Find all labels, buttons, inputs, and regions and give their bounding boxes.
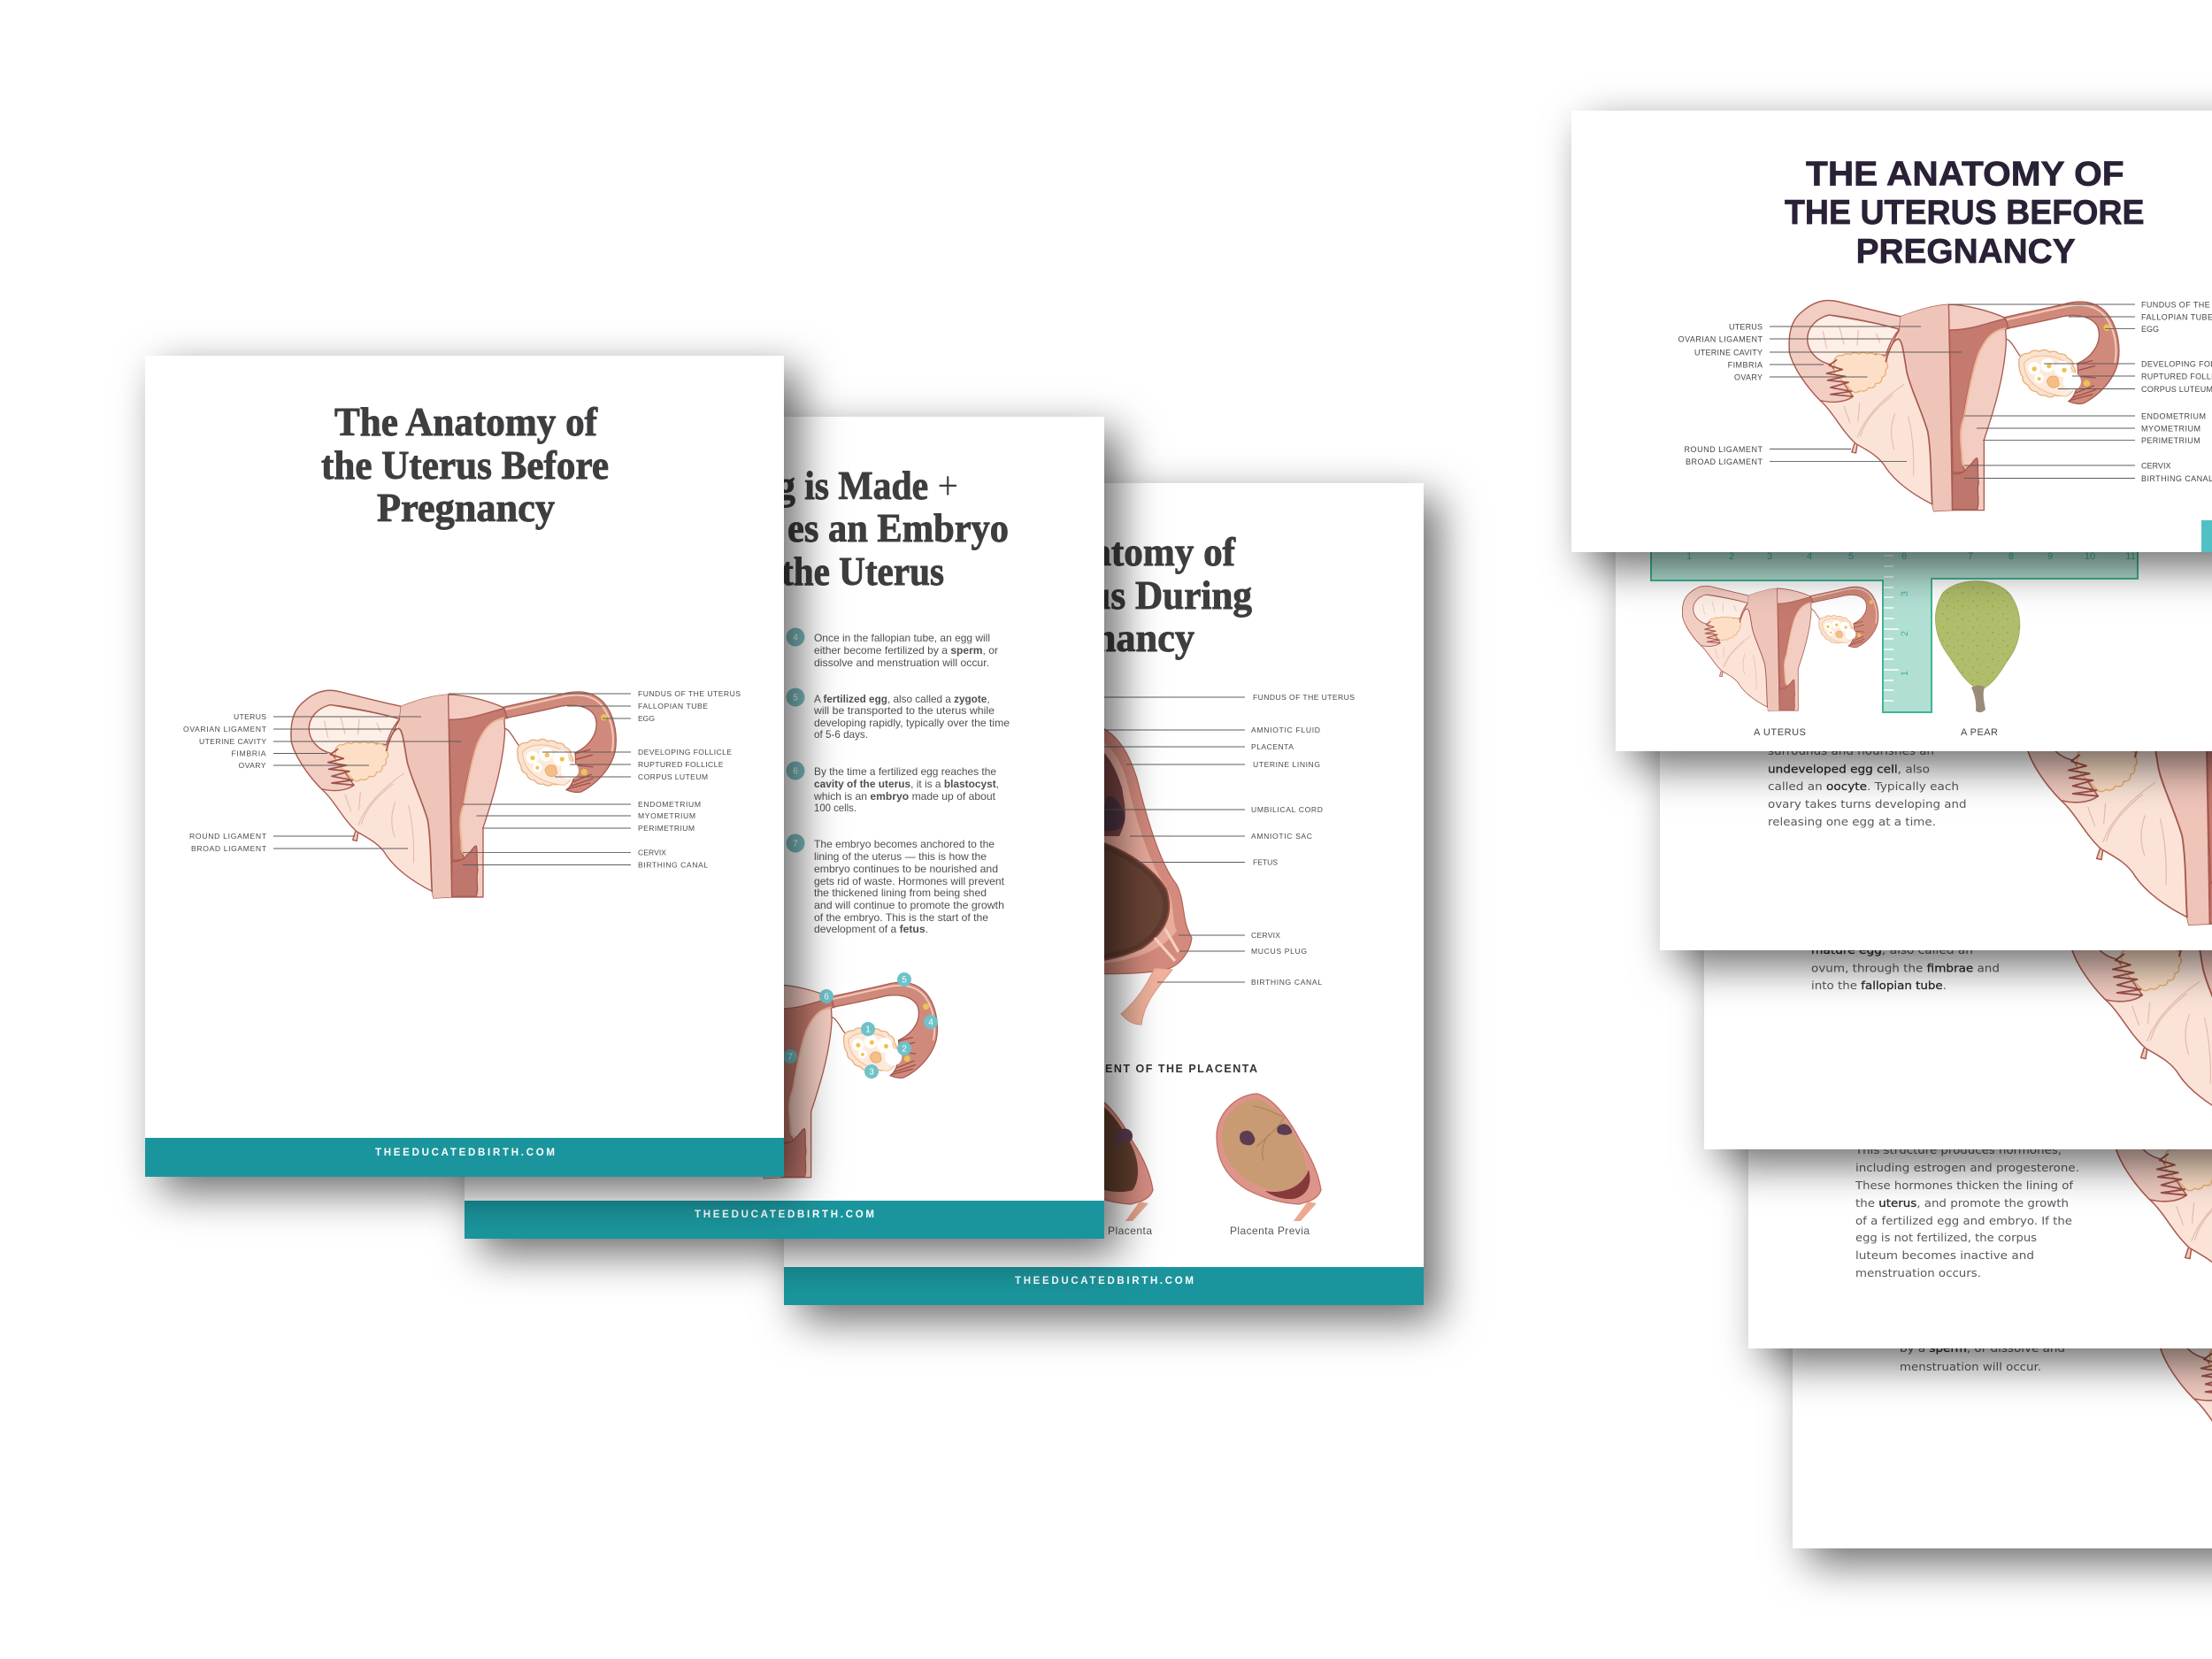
text: oocyte: ovary takes turns developing and (1768, 797, 1966, 810)
illustration: a uterus (1682, 586, 1878, 711)
labels: uterus callouts: CORPUS LUTEUM (2141, 385, 2212, 394)
footer bar (784, 1267, 1424, 1305)
sheet: page background (1748, 951, 2212, 1348)
labels: uterus callouts: ROUND LIGAMENT (189, 832, 267, 841)
labels: uterus callouts: FALLOPIAN TUBE (2141, 313, 2212, 322)
illustration: uterus (1789, 301, 2119, 511)
text: step 7: The embryo becomes anchored to the (814, 838, 995, 850)
title: the anatomy of the uterus before pregnancy: THE UTERUS BEFORE (1785, 194, 2145, 232)
text: hormones: of a fertilized egg and embryo. If the (1855, 1214, 2072, 1227)
text: oocyte: releasing one egg at a time. (1768, 815, 1936, 828)
number badges: uterus stages: 3 (869, 1067, 874, 1078)
ruler: 3 (1900, 591, 1910, 596)
footer bar segment (2201, 520, 2212, 552)
sheet: page background (1704, 752, 2212, 1149)
labels: uterus callouts: MYOMETRIUM (638, 811, 695, 820)
text: step 5: of 5-6 days. (814, 728, 868, 741)
labels: uterus callouts: ENDOMETRIUM (2141, 412, 2206, 421)
illustration: uterus (2115, 1087, 2212, 1324)
footer bar: THEEDUCATEDBIRTH.COM (1015, 1276, 1194, 1286)
panel: how an egg is made page (465, 417, 1104, 1239)
labels: uterus callouts: PERIMETRIUM (2141, 436, 2200, 445)
text: step 7: of the embryo. This is the start of the (814, 911, 988, 924)
number badges: steps 4 to 7: 6 (793, 766, 798, 777)
title: the anatomy of the uterus before pregnancy (1785, 156, 2145, 271)
text: mature egg: into the fallopian tube . (1811, 979, 1947, 992)
labels: uterus callouts: BROAD LIGAMENT (1686, 457, 1763, 466)
labels: uterus callouts: FIMBRIA (1728, 361, 1763, 370)
labels: uterus callouts: PERIMETRIUM (638, 824, 695, 833)
panel: stacked page with menstruation text (1793, 1150, 2212, 1548)
number badges: uterus stages: 7 (787, 1053, 793, 1062)
title: the anatomy of the uterus before pregnancy: PREGNANCY (1856, 233, 2076, 271)
labels: pregnant uterus callouts: UTERINE LINING (1253, 760, 1320, 769)
labels: uterus callouts: CERVIX (638, 849, 666, 857)
text: hormones: This structure produces hormones, (1855, 1143, 2062, 1156)
labels: pregnant uterus callouts: UMBILICAL CORD (1251, 805, 1323, 814)
text: step 5: developing rapidly, typically over the time (814, 717, 1010, 729)
text: step 7: embryo continues to be nourished and (814, 863, 998, 875)
text: oocyte: called an oocyte . Typically each (1768, 780, 1959, 793)
ruler: 9 (2047, 551, 2053, 562)
panel: anatomy before pregnancy page (145, 356, 784, 1177)
text: hormones: including estrogen and progesterone. (1855, 1161, 2079, 1174)
caption: placenta previa: Placenta Previa (1230, 1225, 1310, 1237)
labels: pregnant uterus callouts: FUNDUS OF THE UTERUS (1253, 693, 1355, 702)
panel: stacked page with ovary text (1660, 566, 2212, 950)
text: step 7 (814, 838, 1005, 935)
number badges: uterus stages (783, 972, 938, 1079)
labels: uterus callouts: ROUND LIGAMENT (1685, 445, 1763, 454)
title: anatomy during pregnancy (955, 530, 1252, 660)
title: egg to embryo (777, 464, 1009, 594)
text: step 6: cavity of the uterus, it is a blastocyst, (814, 778, 999, 790)
labels: uterus callouts: FALLOPIAN TUBE (638, 702, 708, 710)
number badges: steps 4 to 7: 5 (793, 694, 798, 703)
labels: uterus callouts: FUNDUS OF THE UTERUS (638, 689, 741, 698)
ruler: 2 (1729, 551, 1734, 562)
text: hormones (1855, 1143, 2079, 1279)
labels: uterus callouts (183, 689, 741, 869)
caption: a uterus: A UTERUS (1754, 727, 1806, 738)
panel: size comparison page (1616, 354, 2212, 751)
labels: uterus callouts: ENDOMETRIUM (638, 800, 701, 809)
labels: uterus callouts: BIRTHING CANAL (2141, 474, 2212, 483)
panel: stacked page with corpus luteum text (1748, 951, 2212, 1348)
title: egg to embryo: es an Embryo (787, 506, 1009, 550)
number badges: uterus stages: 4 (928, 1018, 933, 1028)
text: mature egg: mature egg , also called an (1811, 943, 1973, 956)
footer bar: THEEDUCATEDBIRTH.COM (375, 1148, 555, 1158)
caption: a pear: A PEAR (1961, 727, 1998, 738)
ruler: 1 (1686, 551, 1692, 562)
number badges: uterus stages: 2 (902, 1044, 907, 1055)
labels: uterus callouts: UTERINE CAVITY (199, 737, 266, 746)
title: anatomy during pregnancy: the Uterus During (955, 573, 1252, 618)
number badges: uterus stages: 5 (902, 975, 907, 986)
ruler: 8 (2008, 551, 2014, 562)
footer bar: THEEDUCATEDBIRTH.COM (695, 1210, 874, 1220)
labels: uterus callouts: UTERUS (234, 712, 266, 721)
labels: uterus callouts: OVARY (239, 761, 266, 770)
labels: uterus callouts: OVARIAN LIGAMENT (183, 725, 267, 733)
labels: pregnant uterus callouts: FETUS (1253, 858, 1278, 867)
text: step 4: dissolve and menstruation will occur. (814, 657, 989, 669)
title: anatomy before pregnancy: Pregnancy (377, 486, 555, 530)
labels: uterus callouts: CERVIX (2141, 462, 2171, 471)
title: egg to embryo: the Uterus (781, 549, 944, 594)
labels: uterus callouts: OVARIAN LIGAMENT (1678, 334, 1763, 343)
number badges: steps 4 to 7: 4 (793, 634, 798, 642)
footer bar (145, 1138, 784, 1177)
text: step 5: will be transported to the uterus while (813, 704, 995, 717)
labels: uterus callouts: OVARY (1734, 373, 1763, 382)
illustration: placenta diagram (1048, 1094, 1153, 1221)
ruler: 5 (1848, 551, 1854, 562)
text: mature egg (1811, 943, 2000, 992)
text: step 7: development of a fetus. (814, 923, 928, 935)
labels: uterus callouts: EGG (2141, 325, 2159, 334)
labels: pregnant uterus callouts (1062, 693, 1355, 987)
ruler: 1 (1900, 671, 1910, 676)
text: mature egg: ovum, through the fimbrae and (1811, 962, 2000, 975)
illustration: uterus (2070, 887, 2212, 1124)
labels: uterus callouts: BIRTHING CANAL (638, 860, 708, 869)
title: anatomy during pregnancy: Pregnancy (1017, 616, 1194, 660)
title: anatomy before pregnancy: The Anatomy of (334, 400, 598, 444)
panel: placement page during pregnancy (784, 483, 1424, 1305)
labels: pregnant uterus callouts: CERVIX (1251, 931, 1280, 940)
ruler (1651, 442, 2138, 712)
labels: uterus callouts: DEVELOPING FOLLICLE (638, 748, 732, 757)
text: step 4: either become fertilized by a sperm, or (814, 644, 998, 657)
text: step 4 (814, 632, 998, 669)
labels: uterus callouts: EGG (638, 714, 655, 723)
text: step 6: which is an embryo made up of about (813, 790, 996, 803)
illustration: uterus with numbered stages (629, 981, 937, 1179)
illustration: pregnant uterus (1062, 715, 1192, 1025)
sheet: page background (465, 417, 1104, 1239)
footer bar (465, 1201, 1104, 1239)
sheet: page background (1660, 566, 2212, 950)
labels: uterus callouts: CORPUS LUTEUM (638, 772, 708, 781)
text: step 4: Once in the fallopian tube, an egg will (814, 632, 990, 644)
number badges: uterus stages: 6 (824, 993, 829, 1002)
text: hormones: luteum becomes inactive and (1855, 1248, 2034, 1262)
illustration: uterus (291, 690, 616, 898)
panel: top page anatomy before pregnancy (1571, 111, 2212, 552)
ruler: 3 (1767, 551, 1772, 562)
labels: pregnant uterus callouts: MUCUS PLUG (1251, 947, 1307, 956)
text: oocyte: undeveloped egg cell , also (1768, 763, 1930, 776)
text: egg dissolves (1900, 1341, 2065, 1373)
ruler: 10 (2085, 551, 2095, 562)
title: anatomy before pregnancy (321, 400, 609, 530)
title: egg to embryo: g is Made + (777, 464, 958, 508)
labels: uterus callouts: BROAD LIGAMENT (191, 844, 267, 853)
number badges: steps 4 to 7 (786, 628, 805, 853)
sheet: page background (1616, 354, 2212, 751)
labels: uterus callouts: MYOMETRIUM (2141, 425, 2200, 434)
labels: uterus callouts (1678, 301, 2212, 483)
illustration: uterus (2159, 1286, 2212, 1523)
ruler: 2 (1900, 631, 1910, 636)
text: hormones: the uterus, and promote the growth (1855, 1196, 2069, 1210)
sheet: page background (145, 356, 784, 1177)
text: step 7: the thickened lining from being shed (814, 887, 987, 899)
ruler: 6 (1901, 551, 1907, 562)
text: oocyte (1768, 744, 1966, 828)
text: egg dissolves: by a sperm , or dissolve and (1900, 1341, 2065, 1355)
labels: uterus callouts: FIMBRIA (232, 749, 266, 757)
caption: placenta: Placenta (1108, 1225, 1152, 1237)
sheet: page background (1793, 1150, 2212, 1548)
title: anatomy during pregnancy: The Anatomy of (972, 530, 1236, 574)
sheet: page background (1571, 111, 2212, 552)
text: step 7: and will continue to promote the growth (814, 899, 1004, 911)
title: the anatomy of the uterus before pregnancy: THE ANATOMY OF (1806, 156, 2124, 194)
text: step 7: lining of the uterus — this is how the (814, 850, 987, 863)
text: step 5: A fertilized egg, also called a zygote, (814, 693, 990, 705)
text: hormones: egg is not fertilized, the corpus (1855, 1231, 2037, 1244)
sheet: page background (784, 483, 1424, 1305)
text: egg dissolves: menstruation will occur. (1900, 1360, 2041, 1373)
illustration: placenta previa diagram (1217, 1094, 1321, 1221)
text: hormones: These hormones thicken the lining of (1855, 1179, 2074, 1192)
labels: uterus callouts: UTERUS (1729, 322, 1763, 331)
ruler: 4 (1807, 551, 1812, 562)
text: step 6: 100 cells. (814, 802, 856, 814)
title: anatomy before pregnancy: the Uterus Before (321, 443, 609, 488)
labels: pregnant uterus callouts: PLACENTA (1251, 742, 1294, 751)
ruler: 11 (2125, 551, 2136, 562)
panel: stacked page with ovulation text (1704, 752, 2212, 1149)
text: step 7: gets rid of waste. Hormones will prevent (814, 875, 1005, 887)
heading: placement of the placenta: ENT OF THE PLACENTA (1105, 1063, 1257, 1075)
labels: pregnant uterus callouts: AMNIOTIC SAC (1251, 832, 1312, 841)
labels: pregnant uterus callouts: AMNIOTIC FLUID (1251, 726, 1320, 734)
text: step 6 (813, 765, 999, 814)
labels: uterus callouts: UTERINE CAVITY (1694, 349, 1763, 357)
illustration: uterus (2026, 688, 2212, 925)
labels: uterus callouts: RUPTURED FOLLICLE (638, 760, 724, 769)
text: oocyte: surrounds and nourishes an (1768, 744, 1934, 757)
labels: pregnant uterus callouts: BIRTHING CANAL (1251, 978, 1322, 987)
ruler: 7 (1968, 551, 1973, 562)
text: hormones: menstruation occurs. (1855, 1266, 1981, 1279)
text: step 5 (813, 693, 1010, 741)
illustration: a pear (1936, 581, 2020, 712)
number badges: uterus stages: 1 (865, 1025, 871, 1035)
number badges: steps 4 to 7: 7 (793, 839, 798, 849)
text: step 6: By the time a fertilized egg reaches the (814, 765, 996, 778)
